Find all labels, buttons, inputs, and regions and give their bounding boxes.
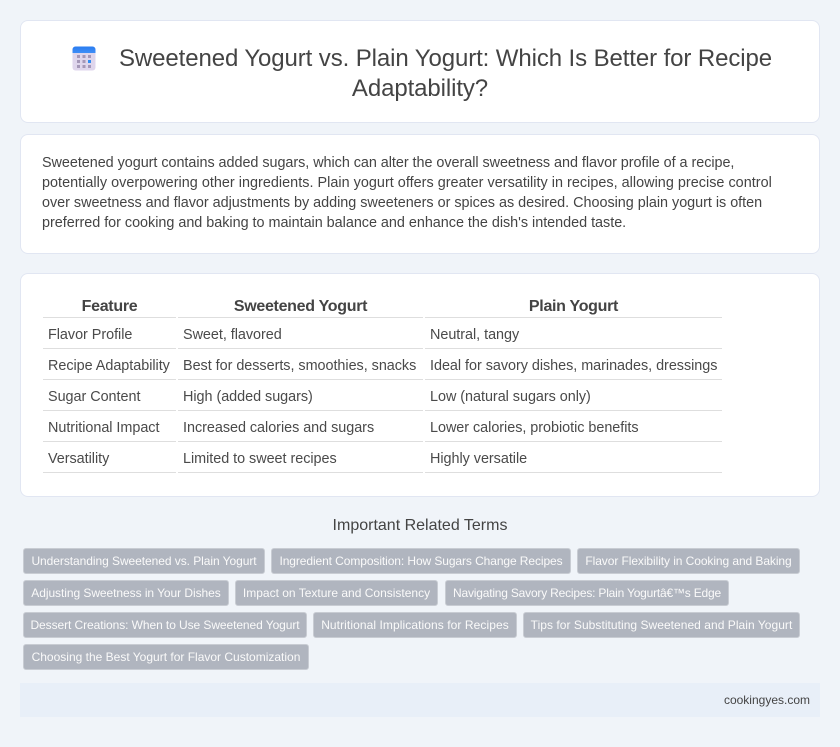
footer source: cookingyes.com: [724, 693, 810, 707]
related term tags: Tips for Substituting Sweetened and Plain Yogurt: [531, 618, 792, 632]
comparison table: Ideal for savory dishes, marinades, dressings: [430, 358, 717, 374]
related term tags: [23, 548, 800, 670]
title: Sweetened Yogurt vs. Plain Yogurt: Which Is Better for Recipe: [119, 45, 772, 72]
related term tags: Understanding Sweetened vs. Plain Yogurt: [31, 554, 257, 568]
comparison table: Best for desserts, smoothies, snacks: [183, 358, 416, 374]
comparison table: Recipe Adaptability: [48, 358, 170, 374]
comparison table: Plain Yogurt: [529, 298, 618, 315]
related term tags: Choosing the Best Yogurt for Flavor Customization: [32, 650, 300, 664]
comparison table: Feature: [82, 298, 137, 315]
comparison table: Low (natural sugars only): [430, 389, 591, 405]
related term tags: Flavor Flexibility in Cooking and Baking: [585, 554, 792, 568]
footer bar: [20, 683, 820, 717]
comparison table: Limited to sweet recipes: [183, 451, 337, 467]
table panel: [20, 273, 820, 497]
intro text: potentially overpowering other ingredients. Plain yogurt offers greater versatility in recipes, allowing precise control: [42, 175, 772, 191]
comparison table: Highly versatile: [430, 451, 527, 467]
comparison table: Flavor Profile: [48, 327, 132, 343]
intro text: over sweetness and flavor adjustments by adding sweeteners or spices as desired. Choosing plain yogurt is often: [42, 195, 762, 211]
comparison table: Increased calories and sugars: [183, 420, 374, 436]
intro text: [42, 155, 772, 231]
comparison table: Neutral, tangy: [430, 327, 519, 343]
intro text: preferred for cooking and baking to maintain balance and enhance the dish's intended taste.: [42, 215, 626, 231]
related term tags: Adjusting Sweetness in Your Dishes: [31, 586, 221, 600]
intro text: Sweetened yogurt contains added sugars, which can alter the overall sweetness and flavor profile of a recipe,: [42, 155, 734, 171]
title: Adaptability?: [352, 75, 488, 102]
comparison table: High (added sugars): [183, 389, 313, 405]
icon: calendar: [72, 46, 96, 70]
comparison table: Sugar Content: [48, 389, 140, 405]
related term tags: Impact on Texture and Consistency: [243, 586, 430, 600]
related term tags: Ingredient Composition: How Sugars Change Recipes: [279, 554, 563, 568]
comparison table: Versatility: [48, 451, 109, 467]
comparison table: Lower calories, probiotic benefits: [430, 420, 639, 436]
related terms heading: Important Related Terms: [333, 517, 507, 534]
comparison table: Sweetened Yogurt: [234, 298, 367, 315]
related term tags: Nutritional Implications for Recipes: [321, 618, 509, 632]
comparison table: Nutritional Impact: [48, 420, 159, 436]
comparison table: [43, 298, 722, 473]
comparison table: Sweet, flavored: [183, 327, 282, 343]
title: [119, 45, 772, 102]
related term tags: Navigating Savory Recipes: Plain Yogurtâ€™s Edge: [453, 586, 721, 600]
related term tags: Dessert Creations: When to Use Sweetened Yogurt: [30, 618, 300, 632]
header panel: [20, 20, 820, 123]
intro panel: [20, 134, 820, 254]
